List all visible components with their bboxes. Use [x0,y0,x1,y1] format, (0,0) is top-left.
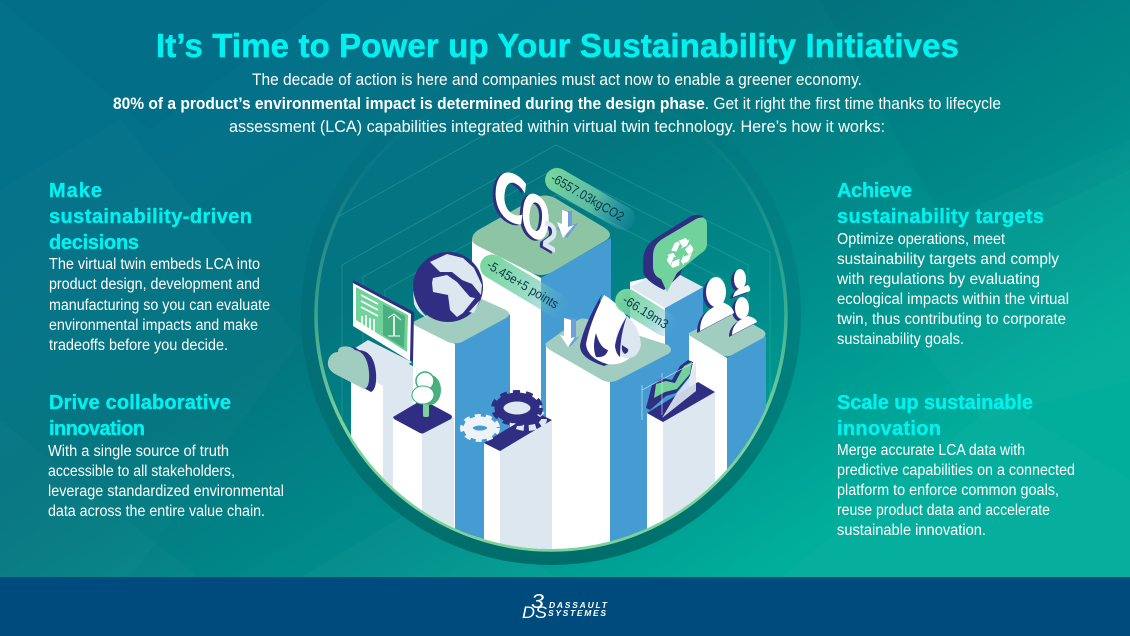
icon: recycle speech bubble [643,215,707,292]
body text: environmental impacts and make [49,317,258,334]
body text [48,443,284,520]
body text: sustainability goals. [837,331,964,348]
heading [837,180,1044,228]
icon: gears [462,392,544,440]
tower: globe [413,298,510,546]
icon: down arrow near CO2 [556,210,578,238]
icon: down arrow near drop [560,318,580,347]
body text: platform to enforce common goals, [837,482,1059,499]
heading: Make [49,180,102,202]
heading: decisions [49,232,139,254]
icon: area chart [642,360,696,420]
body text: data across the entire value chain. [48,503,265,520]
circular stage [301,65,801,565]
value label: CO2: -6557.03kgCO2 [548,170,627,224]
icon: CO2 letters [489,153,560,263]
icon: tree [412,372,441,417]
icon: CO2 letters: 2 [540,213,560,263]
heading: innovation [837,418,941,440]
body text: reuse product data and accelerate [837,502,1050,519]
heading: innovation [49,418,145,440]
intro text [113,70,1001,136]
heading: sustainability targets [837,206,1044,228]
icon: globe [413,252,483,322]
tower: monitor [351,360,415,506]
body text: ecological impacts within the virtual [837,291,1069,308]
logo: Dassault Systemes: SYSTEMES [548,608,606,618]
body text: predictive capabilities on a connected [837,462,1075,479]
body text: The virtual twin embeds LCA into [49,256,260,273]
heading [49,392,231,440]
heading: sustainability-driven [49,206,252,228]
tower: water drop [546,318,672,549]
intro text: The decade of action is here and companies must act now to enable a greener economy. [252,70,862,89]
panel: scale up sustainable innovation [837,392,1075,539]
isometric towers illustration [338,114,770,549]
value label: water volume [611,284,681,341]
tower: chart [647,382,715,528]
tower: CO2 [472,196,611,549]
icon: water drop [580,294,641,366]
tower: recycle [630,274,703,536]
body text: sustainability targets and comply [837,251,1059,268]
title: It’s Time to Power up Your Sustainability Initiatives [156,27,959,64]
footer bar [0,577,1130,636]
body text: with regulations by evaluating [836,271,1040,288]
body text: product design, development and [49,276,260,293]
recycle symbol: ♻ [664,226,696,284]
body text [49,256,270,354]
tower: people [688,314,766,504]
panel: achieve sustainability targets [836,180,1069,348]
logo: Dassault Systemes: 3 [531,591,544,613]
body text: accessible to all stakeholders, [48,463,235,480]
icon: CO2 letters: O [517,176,554,260]
body text: Optimize operations, meet [837,231,1006,248]
tower: tree [393,403,454,528]
heading: Achieve [837,180,912,202]
icon: people [697,269,757,337]
body text: manufacturing so you can evaluate [49,297,270,314]
icon: monitor [352,280,414,372]
panel: make sustainability-driven decisions [49,180,270,354]
heading: Scale up sustainable [837,392,1033,414]
grid guide lines [300,115,770,420]
logo: Dassault Systemes [522,591,608,622]
body text [837,442,1075,539]
intro text: 80% of a product’s environmental impact is determined during the design phase. Get it right the first time thanks to lifecycle [113,94,1001,113]
panel: drive collaborative innovation [48,392,284,520]
intro text: assessment (LCA) capabilities integrated within virtual twin technology. Here’s how it works: [229,117,885,136]
logo: Dassault Systemes: DASSAULT [549,600,608,610]
icon: CO2 letters: C [489,153,531,243]
heading: Drive collaborative [49,392,231,414]
body text: twin, thus contributing to corporate [837,311,1066,328]
tower: gears [484,415,552,549]
body text: Merge accurate LCA data with [837,442,1025,459]
icon: cloud [328,346,376,392]
body text [836,231,1069,348]
body text: With a single source of truth [48,443,229,460]
heading [837,392,1033,440]
body text: tradeoffs before you decide. [49,337,228,354]
value label: points: -5.45e+5 points [484,257,562,312]
value label: water volume: -66.19m3 [620,292,671,332]
body text: leverage standardized environmental [48,483,284,500]
logo: Dassault Systemes: DS [522,603,548,622]
heading [49,180,252,254]
body text: sustainable innovation. [837,522,986,539]
